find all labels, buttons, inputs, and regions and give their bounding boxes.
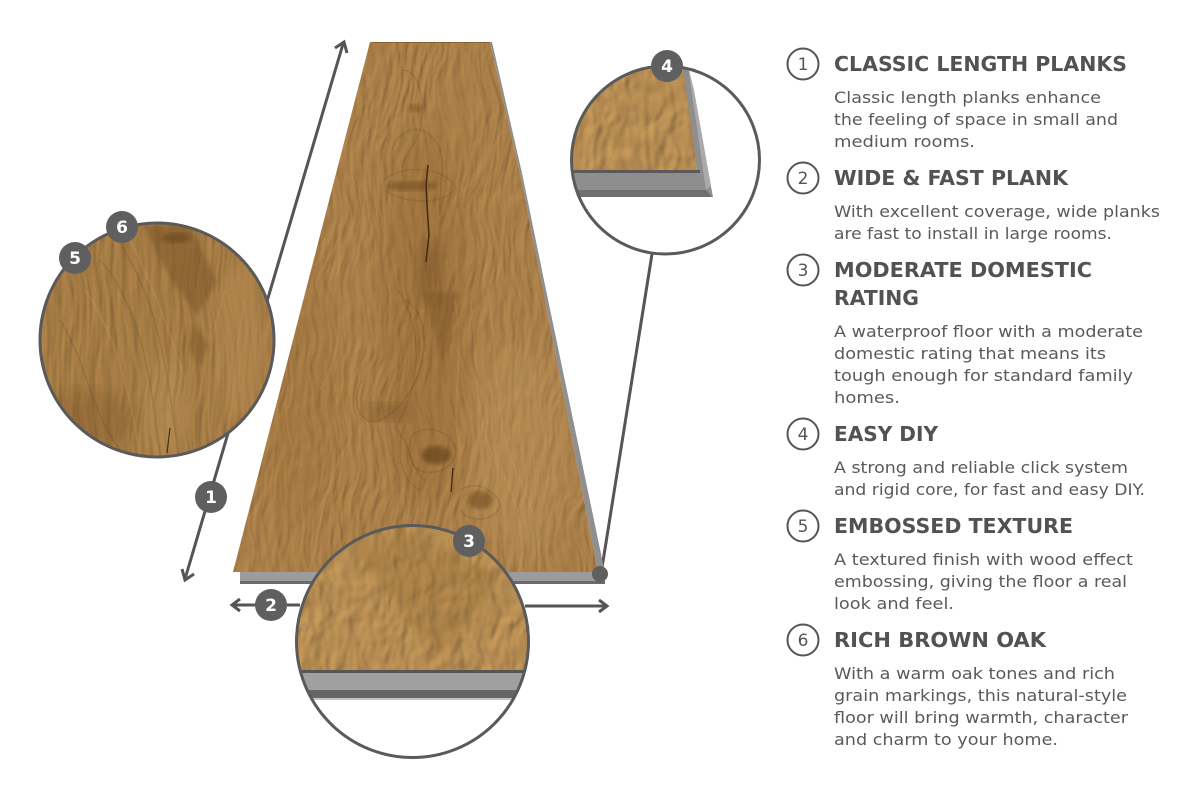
profile layers [302,670,524,700]
feature 2: wide and fast plank [788,162,1160,243]
detail circle: click system corner [570,66,761,256]
feature 5: embossed texture: embossing, giving the floor a real [834,572,1127,591]
feature 4: easy DIY: and rigid core, for fast and easy DIY. [834,480,1145,499]
feature 6: rich brown oak: With a warm oak tones and rich [834,664,1115,683]
badge 1: 1 [205,488,217,508]
badge 3 [453,525,485,557]
feature 4: easy DIY: EASY DIY [834,422,939,446]
badge 5: 5 [69,249,81,269]
detail circle: wood grain [38,222,276,458]
plank side edge [490,42,605,573]
feature 3: moderate domestic rating: homes. [834,388,900,407]
feature 6: rich brown oak [788,624,1128,749]
feature 6: rich brown oak: grain markings, this natural-style [834,686,1127,705]
feature 5: embossed texture: look and feel. [834,594,954,613]
plank front edge [240,572,605,584]
badge 6: 6 [116,218,128,238]
grain lines around knots [310,70,500,564]
detail circle: plank profile [295,524,530,759]
side profile [570,66,713,197]
feature 2: wide and fast plank: With excellent coverage, wide planks [834,202,1160,221]
badge 4: 4 [661,57,673,77]
badge 5 [59,242,91,274]
feature 6: rich brown oak: floor will bring warmth, character [834,708,1128,727]
connector line to end-joint detail [601,254,652,574]
feature 6: rich brown oak: and charm to your home. [834,730,1058,749]
feature 2: wide and fast plank: 2 [798,169,808,189]
curved grain lines [60,242,217,455]
feature 1: classic length planks: Classic length planks enhance [834,88,1101,107]
feature 1: classic length planks: medium rooms. [834,132,975,151]
feature 5: embossed texture: A textured finish with wood effect [834,550,1133,569]
feature 1: classic length planks: 1 [798,55,808,75]
feature 1: classic length planks [788,48,1127,151]
feature 4: easy DIY [788,418,1145,499]
width arrow [232,599,607,612]
badge 3: 3 [463,532,475,552]
feature 3: moderate domestic rating [788,254,1143,407]
feature 5: embossed texture: 5 [798,517,808,537]
feature 4: easy DIY: 4 [798,425,808,445]
plank [233,42,605,584]
feature 3: moderate domestic rating: RATING [834,286,919,310]
length arrow [182,42,347,580]
badge 1 [195,481,227,513]
badge 6 [106,211,138,243]
badge 2 [255,589,287,621]
end-joint corner dot [592,566,608,582]
feature 6: rich brown oak: RICH BROWN OAK [834,628,1048,652]
feature 2: wide and fast plank: WIDE & FAST PLANK [834,166,1070,190]
feature 3: moderate domestic rating: 3 [798,261,808,281]
feature 2: wide and fast plank: are fast to install in large rooms. [834,224,1112,243]
feature 3: moderate domestic rating: MODERATE DOMESTIC [834,258,1092,282]
feature 3: moderate domestic rating: domestic rating that means its [834,344,1106,363]
feature 1: classic length planks: CLASSIC LENGTH PLANKS [834,52,1127,76]
feature 5: embossed texture [788,510,1133,613]
badge 4 [651,50,683,82]
badge 2: 2 [265,596,277,616]
wood corner [573,68,697,170]
feature 1: classic length planks: the feeling of space in small and [834,110,1118,129]
feature 5: embossed texture: EMBOSSED TEXTURE [834,514,1073,538]
feature 6: rich brown oak: 6 [798,631,808,651]
feature 4: easy DIY: A strong and reliable click system [834,458,1128,477]
feature 3: moderate domestic rating: A waterproof floor with a moderate [834,322,1143,341]
feature 3: moderate domestic rating: tough enough for standard family [834,366,1133,385]
plank wood surface [233,42,597,572]
